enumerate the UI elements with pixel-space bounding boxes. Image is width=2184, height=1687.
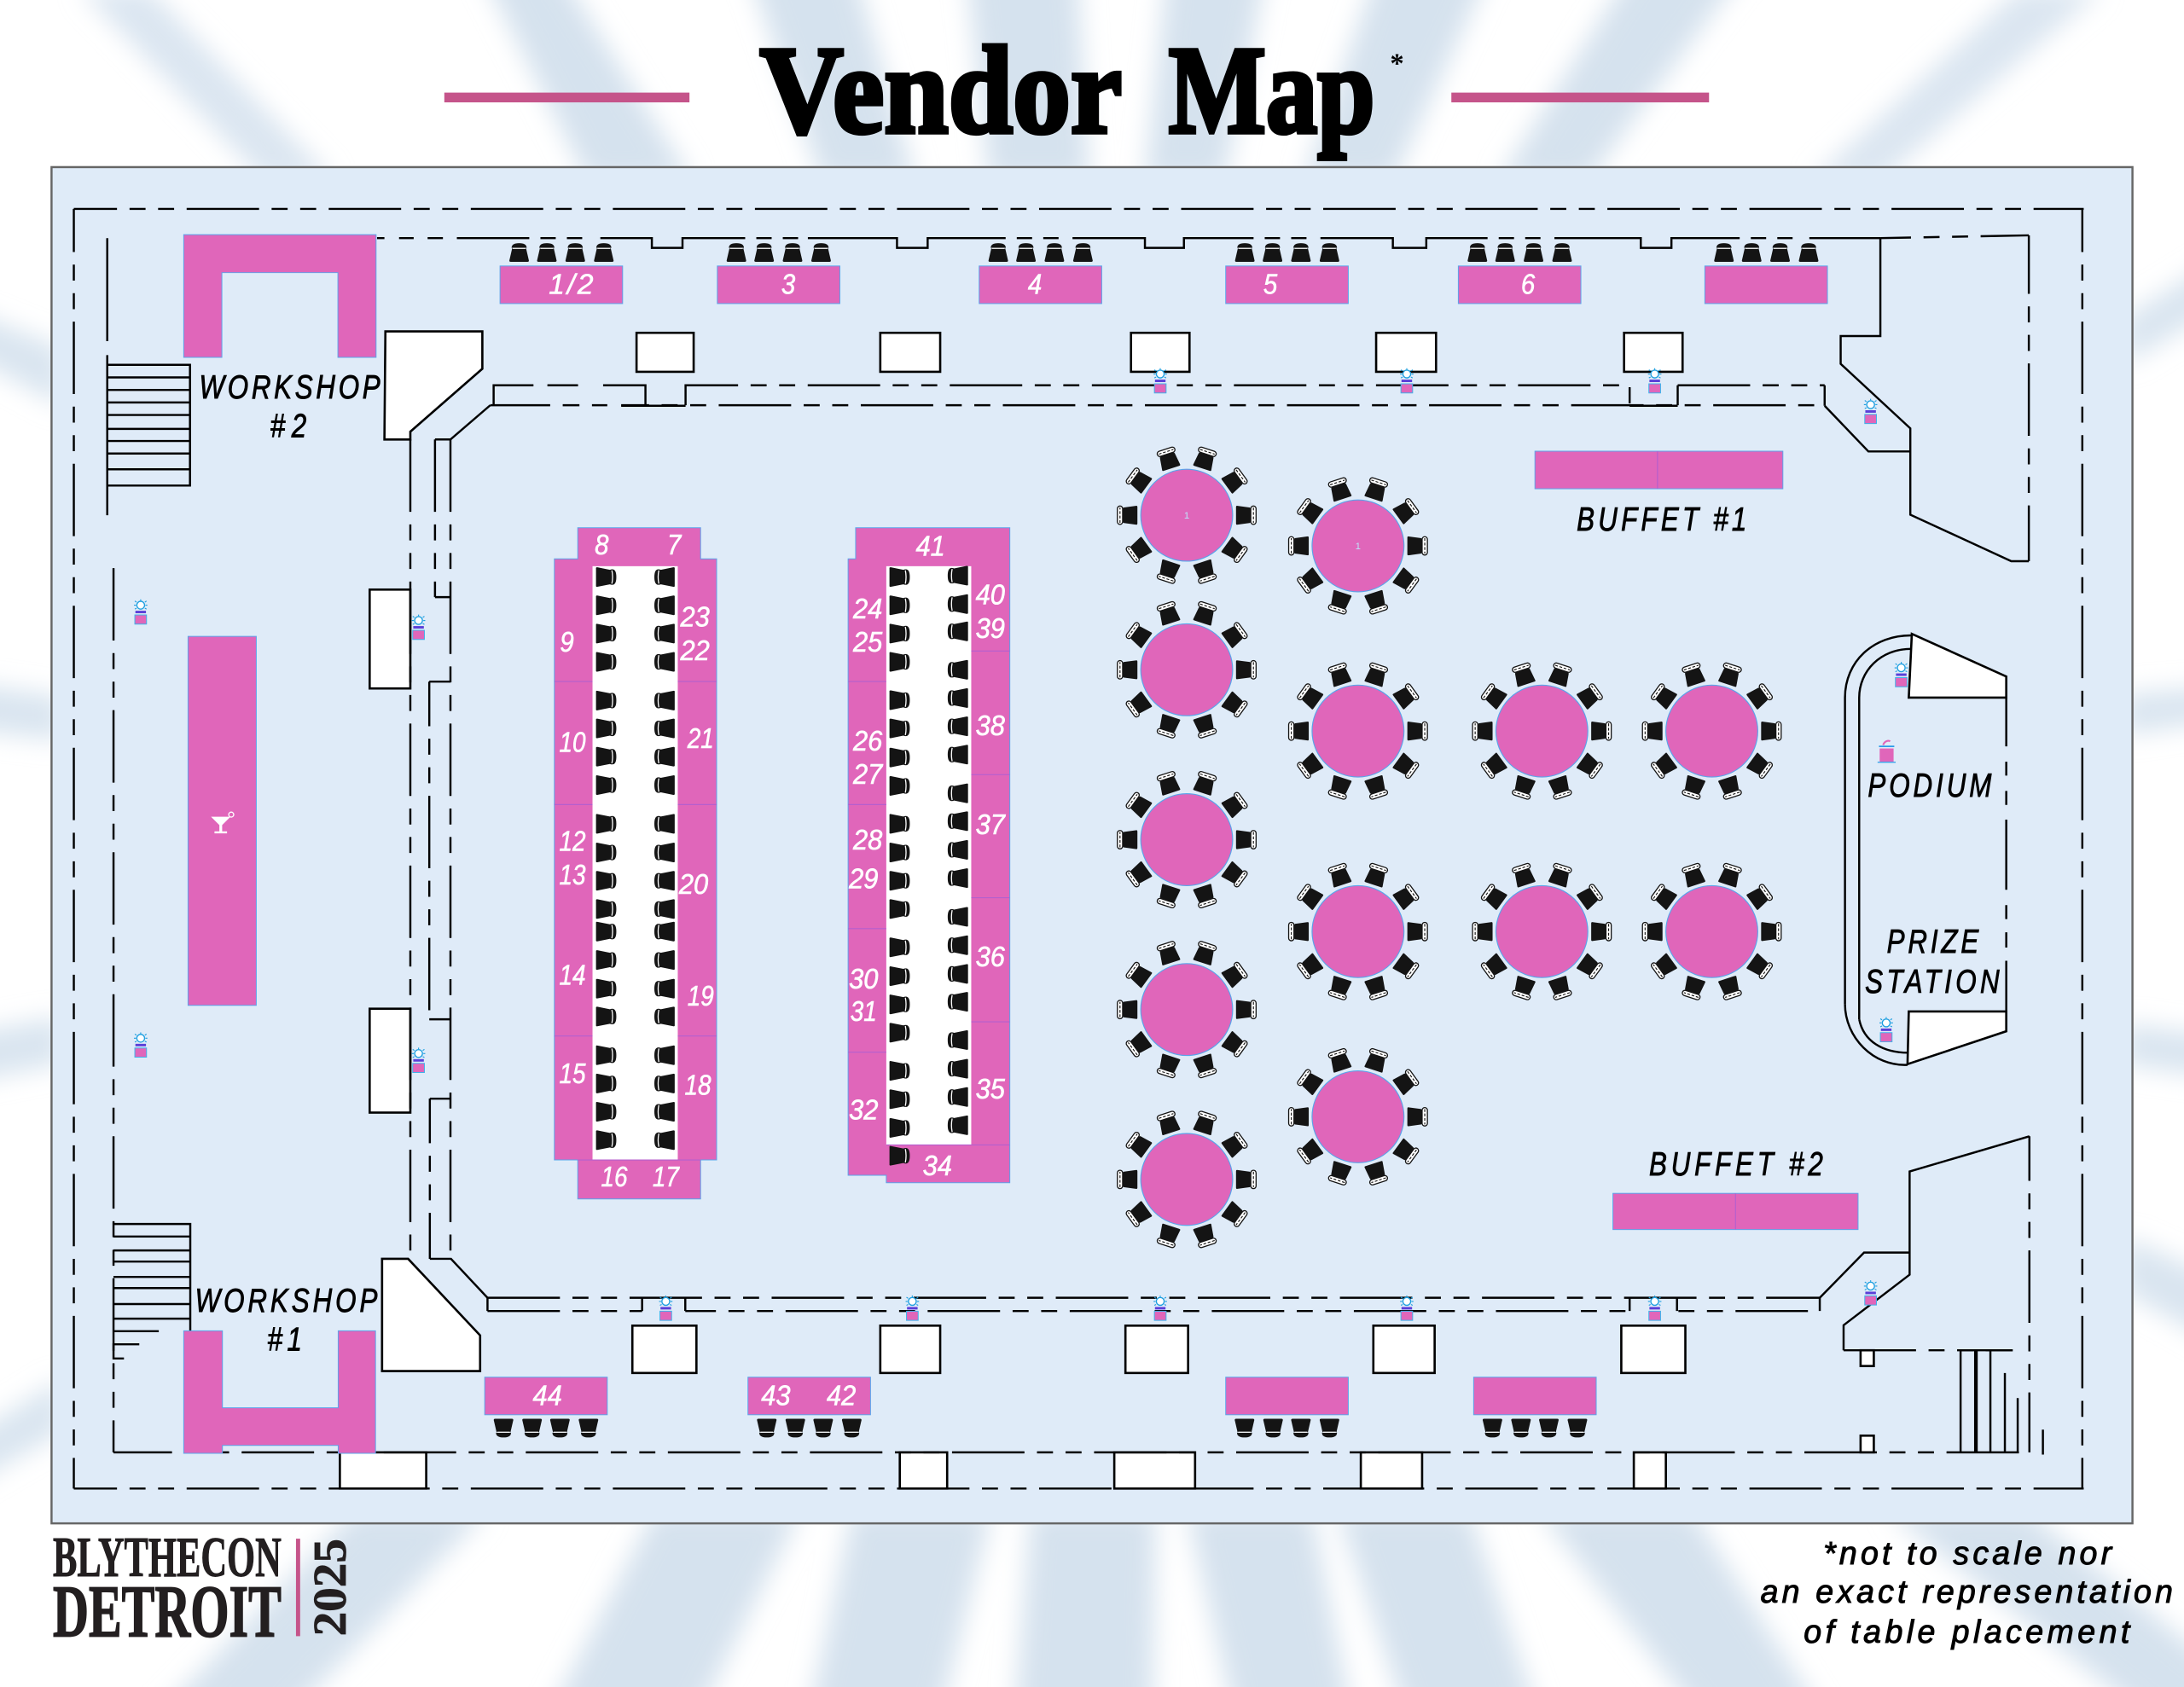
table numbers: table A: 8	[595, 530, 609, 561]
white structural boxes	[340, 332, 2007, 1488]
buffet 1 table	[1535, 451, 1783, 489]
table numbers: table B: 27	[852, 759, 884, 791]
round tables	[1118, 446, 1781, 1249]
table numbers: table A: 16	[601, 1162, 628, 1193]
panel: floor map	[51, 167, 2133, 1523]
title rule left	[444, 93, 689, 102]
table numbers: table B: 30	[849, 964, 879, 995]
table numbers: table A: 17	[653, 1162, 680, 1193]
icon: podium	[1878, 741, 1896, 762]
table numbers: table B	[848, 530, 1006, 1182]
title: Map	[1169, 20, 1374, 159]
table numbers: table A: 14	[560, 959, 586, 991]
round tables: 1	[1184, 511, 1189, 521]
table numbers: table A: 19	[688, 981, 714, 1012]
walls	[74, 209, 2083, 1488]
logo: 2025	[305, 1539, 357, 1636]
table numbers: table A: 12	[560, 826, 586, 858]
table numbers: table A: 9	[560, 627, 574, 658]
table numbers: table A: 22	[680, 635, 710, 667]
buffet 2 table	[1613, 1193, 1858, 1230]
labels: BUFFET #1	[1577, 501, 1746, 538]
table numbers: table B: 26	[852, 726, 883, 757]
table numbers: table A	[560, 530, 714, 1193]
table numbers: table B: 32	[849, 1095, 879, 1127]
title: *	[1390, 49, 1404, 79]
bar with martini icon	[188, 636, 256, 1006]
table numbers: table A: 15	[560, 1058, 586, 1090]
vendor tables: top row: 4	[1028, 270, 1042, 301]
lamps	[134, 368, 1908, 1320]
table numbers: table A: 18	[684, 1070, 712, 1101]
table numbers: table A: 13	[560, 860, 586, 891]
logo	[53, 1526, 357, 1652]
table numbers: table B: 31	[851, 996, 877, 1028]
table numbers: table A: 21	[687, 723, 714, 755]
table numbers: table B: 34	[923, 1151, 952, 1182]
labels: BUFFET #2	[1649, 1145, 1823, 1183]
labels: PRIZE	[1887, 923, 1979, 960]
table numbers: table B: 28	[852, 825, 883, 856]
stairs: bottom right	[1960, 1350, 2043, 1454]
table numbers: table B: 39	[976, 613, 1005, 645]
long table B	[848, 528, 1010, 1183]
labels: WORKSHOP	[195, 1282, 378, 1319]
vendor tables: top row: 3	[781, 270, 796, 301]
long table A	[555, 528, 717, 1199]
table numbers: table A: 10	[560, 728, 586, 759]
labels: #1	[267, 1320, 302, 1359]
table numbers: table B: 29	[848, 864, 878, 896]
logo: BLYTHECON	[53, 1526, 282, 1589]
vendor tables: bottom row: 44	[532, 1380, 562, 1412]
workshop 2 table	[183, 235, 376, 357]
footnote: of table placement	[1804, 1614, 2131, 1649]
vendor tables: bottom row: 43	[761, 1380, 791, 1412]
table numbers: table B: 35	[976, 1074, 1005, 1105]
labels	[195, 368, 2000, 1359]
workshop 1 table	[183, 1330, 375, 1453]
table numbers: table A: 20	[678, 869, 709, 901]
footnote: an exact representation	[1761, 1574, 2173, 1609]
title: Vendor	[760, 20, 1122, 159]
vendor tables: bottom row	[485, 1377, 1596, 1415]
round tables: 1	[1356, 542, 1361, 552]
chairs: top row	[509, 243, 1818, 262]
vendor tables: top row: 5	[1263, 270, 1277, 301]
table numbers: table B: 37	[976, 809, 1006, 841]
table numbers: table B: 40	[976, 580, 1005, 612]
footnote	[1761, 1535, 2173, 1649]
title rule right	[1451, 93, 1709, 102]
table numbers: table B: 38	[976, 710, 1005, 742]
footnote: *not to scale nor	[1823, 1535, 2113, 1571]
labels: PODIUM	[1867, 767, 1992, 804]
labels: WORKSHOP	[199, 368, 380, 406]
title	[760, 20, 1404, 159]
table numbers: table B: 36	[976, 942, 1005, 973]
logo: DETROIT	[53, 1570, 282, 1652]
labels: #2	[270, 407, 306, 445]
stairs: top left	[107, 365, 190, 485]
chairs: bottom row	[494, 1419, 1587, 1437]
vendor tables: top row	[500, 266, 1827, 304]
table numbers: table B: 25	[852, 627, 883, 658]
stage track	[1845, 635, 2007, 1065]
table numbers: table B: 24	[852, 594, 882, 625]
labels: STATION	[1865, 962, 2000, 1000]
vendor tables: top row: 6	[1521, 270, 1536, 301]
vendor tables: bottom row: 42	[827, 1380, 857, 1412]
table numbers: table B: 41	[915, 530, 945, 562]
table numbers: table A: 7	[667, 530, 682, 561]
chairs: table A	[596, 567, 675, 1150]
table numbers: table A: 23	[680, 602, 710, 634]
stairs: bottom left	[113, 1224, 190, 1359]
chairs: table B	[890, 565, 968, 1166]
vendor tables: top row: 1/2	[549, 270, 594, 301]
